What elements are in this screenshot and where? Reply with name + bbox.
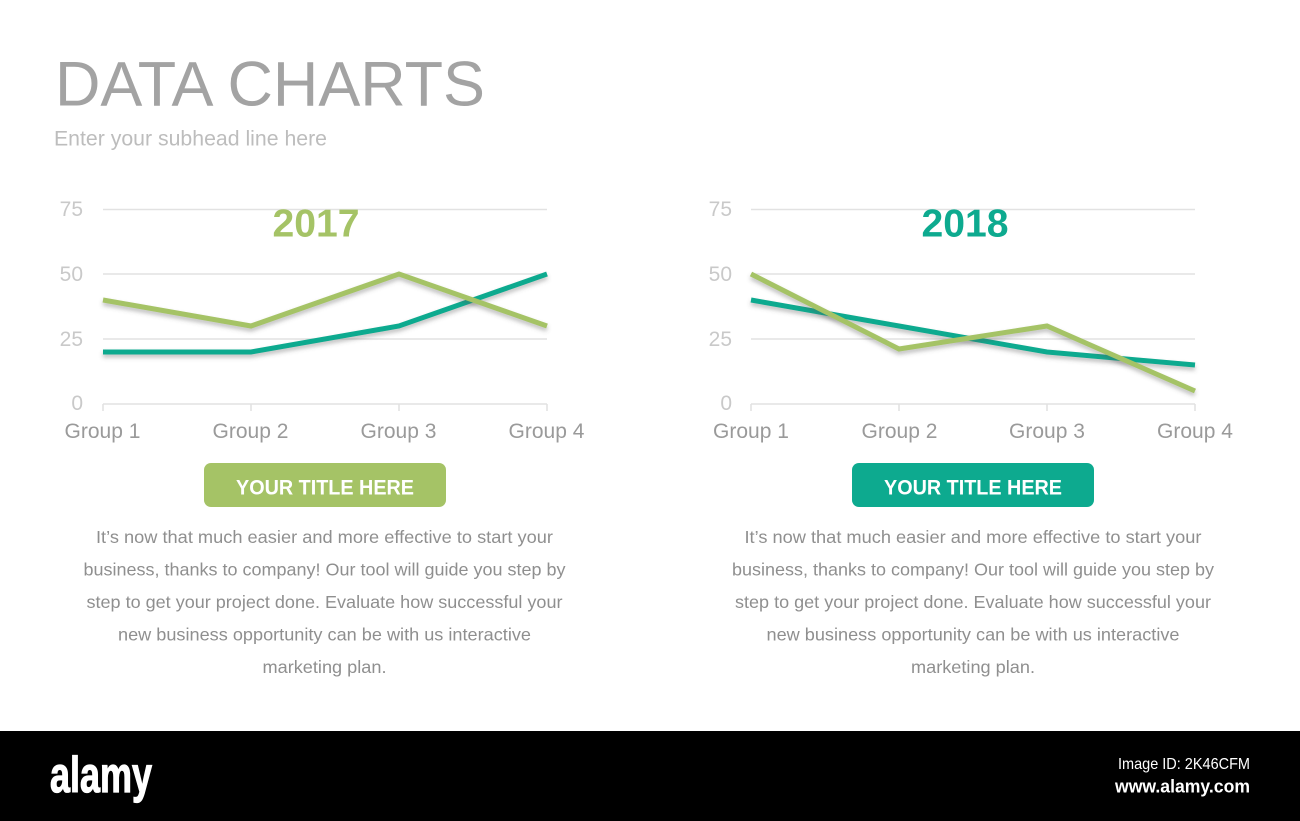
- series: green line: [751, 274, 1195, 391]
- y axis labels: 50: [60, 263, 83, 286]
- x axis labels: Group 2: [862, 420, 937, 443]
- y axis labels: [60, 198, 83, 415]
- description text: marketing plan.: [911, 657, 1035, 677]
- description text: new business opportunity can be with us interactive: [766, 624, 1180, 644]
- year label: 2018: 2018: [922, 202, 1008, 246]
- x axis labels: Group 4: [509, 420, 585, 443]
- series: teal line: [103, 274, 547, 352]
- x axis labels: [713, 420, 1233, 443]
- description text: It’s now that much easier and more effective to start your: [96, 527, 553, 547]
- button: your title here: [852, 463, 1094, 507]
- x axis labels: Group 3: [361, 420, 436, 443]
- series: teal line: [751, 300, 1195, 365]
- y axis labels: 50: [709, 263, 732, 286]
- panel: 2018: [709, 198, 1233, 677]
- description text: business, thanks to company! Our tool will guide you step by: [732, 560, 1214, 580]
- description text: step to get your project done. Evaluate how successful your: [735, 592, 1211, 612]
- description text: business, thanks to company! Our tool will guide you step by: [84, 560, 566, 580]
- series: green line: [103, 274, 547, 326]
- x axis labels: Group 1: [713, 420, 789, 443]
- panel: 2017: [60, 198, 585, 677]
- description text: [84, 527, 566, 677]
- x axis labels: [65, 420, 585, 443]
- image id: Image ID: 2K46CFM: [1118, 756, 1250, 773]
- x axis labels: Group 4: [1157, 420, 1233, 443]
- y axis labels: 25: [60, 328, 83, 351]
- y axis labels: 25: [709, 328, 732, 351]
- y axis labels: 75: [709, 198, 732, 221]
- website: www.alamy.com: [1114, 776, 1250, 796]
- line chart: 2018: [709, 198, 1233, 443]
- y axis labels: 75: [60, 198, 83, 221]
- y axis labels: [709, 198, 732, 415]
- x axis labels: Group 3: [1009, 420, 1085, 443]
- x axis labels: Group 2: [213, 420, 288, 443]
- year label: 2017: 2017: [272, 202, 360, 246]
- line chart: 2017: [60, 198, 585, 443]
- title: DATA CHARTS: [55, 50, 485, 120]
- footer logo: alamy: alamy: [50, 747, 152, 803]
- description text: marketing plan.: [262, 657, 386, 677]
- description text: new business opportunity can be with us interactive: [118, 624, 531, 644]
- button: your title here: YOUR TITLE HERE: [884, 476, 1062, 500]
- footer band: [0, 731, 1300, 821]
- x axis labels: Group 1: [65, 420, 140, 443]
- y axis labels: 0: [720, 392, 732, 415]
- y axis labels: 0: [71, 392, 83, 415]
- subhead: Enter your subhead line here: [54, 126, 327, 150]
- button: your title here: [204, 463, 446, 507]
- button: your title here: YOUR TITLE HERE: [236, 476, 414, 500]
- description text: step to get your project done. Evaluate how successful your: [86, 592, 563, 612]
- description text: [732, 527, 1214, 677]
- description text: It’s now that much easier and more effective to start your: [744, 527, 1202, 547]
